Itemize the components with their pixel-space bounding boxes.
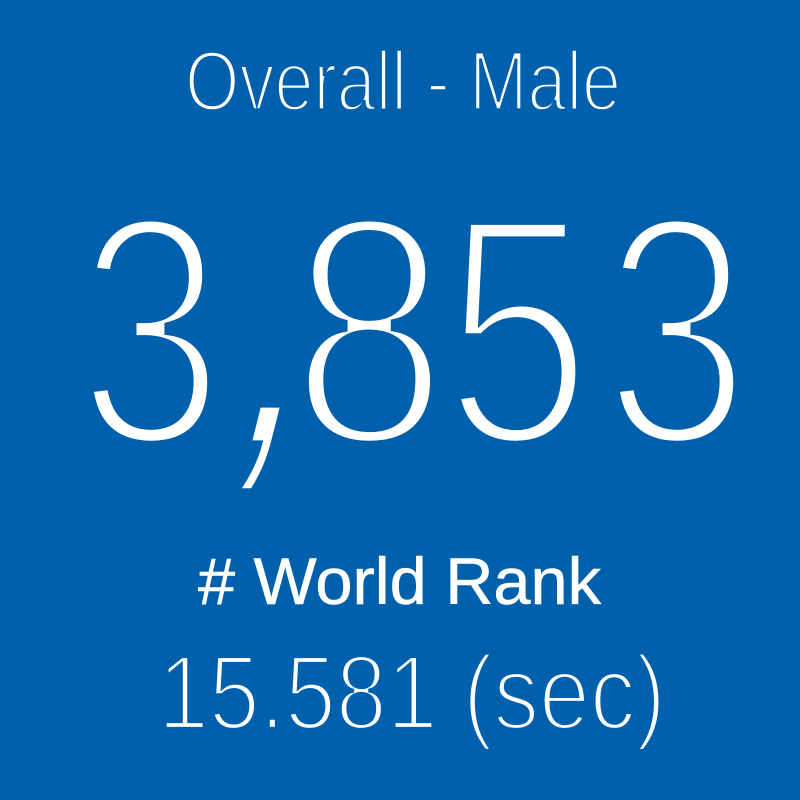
secondary value: time: 15.581 (sec) [158,634,666,752]
main number: rank: 8 [291,147,448,514]
main number: rank: 3 [604,147,750,514]
label: world rank: # World Rank [198,544,602,618]
main number: rank [78,105,750,523]
main number: rank: , [206,105,380,523]
main number: rank: 3 [78,147,224,514]
main number: rank: 5 [444,148,592,514]
heading: category: Overall - Male [185,34,621,128]
